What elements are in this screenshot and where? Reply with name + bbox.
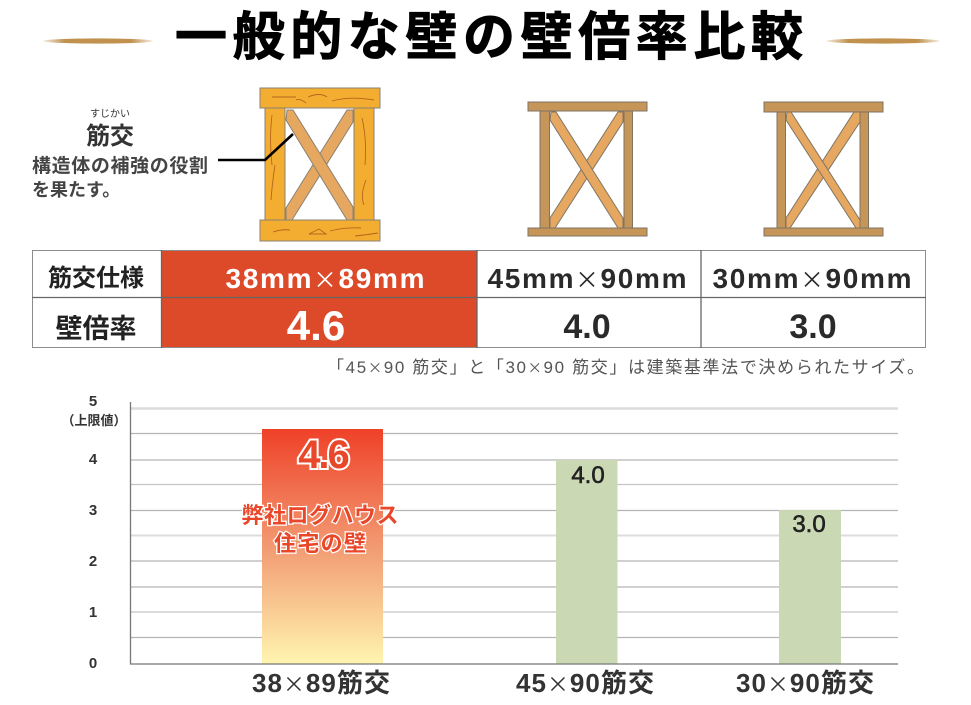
row heading: brace specification: 筋交仕様: [48, 265, 144, 292]
value label: 4.0: 4.0: [571, 462, 605, 489]
brace explanation callout: を果たす。: [32, 180, 120, 200]
value label: 4.6: 4.6: [298, 433, 349, 477]
category labels: [252, 668, 874, 699]
spec values: 38mm×89mm: [226, 261, 424, 295]
y-axis labels: 3: [89, 502, 97, 519]
brace explanation callout: 構造体の補強の役割: [32, 155, 208, 177]
bar annotation: 弊社ログハウス: [242, 503, 398, 528]
right title ornament: [826, 38, 940, 44]
frame: 38x89 highlighted wood frame: [260, 88, 380, 241]
callout leader line: [218, 134, 293, 160]
highlighted column: [161, 250, 477, 348]
brace explanation callout: 筋交: [86, 123, 134, 150]
y-axis labels: 2: [89, 553, 97, 570]
frame: 45x90 wood frame: [528, 102, 647, 236]
specification table: [32, 250, 926, 349]
y-axis labels: 5: [89, 393, 97, 410]
ratio values: 4.6: [287, 302, 345, 349]
bar: 38x89: [262, 429, 383, 664]
y-axis labels: 4: [89, 451, 98, 468]
wood grain marks: [270, 94, 378, 236]
bar: 30x90: [779, 510, 841, 664]
specification table: 3.0: [789, 308, 837, 346]
brace explanation callout: すじかい: [90, 108, 130, 120]
bar: 45x90: [556, 460, 618, 664]
value label: 3.0: 3.0: [792, 511, 826, 538]
row heading: wall ratio: 壁倍率: [56, 314, 136, 344]
table footnote: 「45×90 筋交」と「30×90 筋交」は建築基準法で決められたサイズ。: [327, 357, 924, 378]
title: 一般的な壁の壁倍率比較: [175, 9, 809, 67]
y-axis labels: 0: [89, 655, 97, 672]
y-axis labels: （上限値）: [61, 413, 127, 428]
category labels: 30×90筋交: [736, 668, 874, 699]
frame: 30x90 wood frame: [764, 102, 883, 236]
y-axis labels: [61, 393, 127, 672]
left title ornament: [43, 38, 153, 44]
category labels: 38×89筋交: [252, 668, 390, 699]
specification table: 4.0: [563, 308, 611, 346]
specification table: 45mm×90mm: [488, 261, 686, 295]
y-axis labels: 1: [89, 604, 97, 621]
grid lines: [130, 408, 898, 638]
bar chart: [61, 393, 898, 699]
category labels: 45×90筋交: [516, 668, 654, 699]
bar annotation: 住宅の壁: [274, 531, 366, 556]
axes: [130, 402, 898, 664]
brace explanation callout: [32, 108, 208, 200]
specification table: 30mm×90mm: [712, 261, 912, 295]
bar annotation: [242, 503, 398, 556]
